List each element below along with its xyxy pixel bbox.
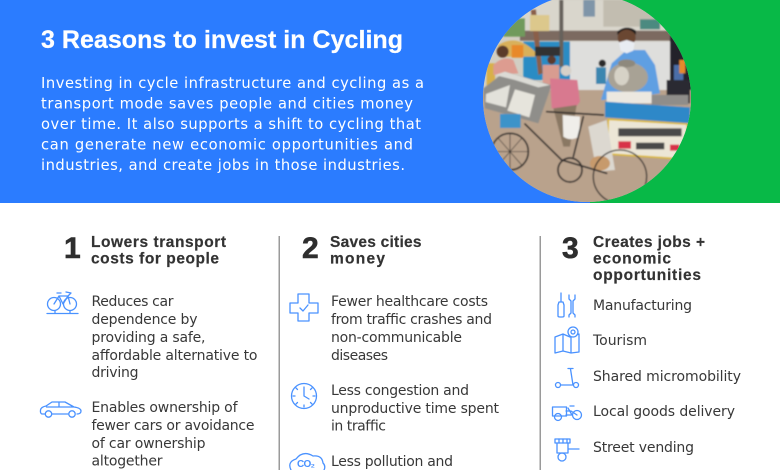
- icon: screwdriver and wrench: [558, 293, 575, 317]
- photo: street vendor with cargo bicycle: [477, 0, 697, 207]
- label: street vending: Street vending: [593, 440, 694, 456]
- text: healthcare costs: non-communicable: [331, 330, 462, 346]
- text: less congestion: unproductive time spent: [331, 401, 500, 417]
- number 1: 1: [64, 232, 81, 265]
- label: local goods delivery: Local goods delivery: [593, 404, 735, 420]
- icon: CO2 cloud: [290, 454, 325, 470]
- text: healthcare costs: Fewer healthcare costs: [331, 294, 488, 310]
- heading 2: money: [330, 250, 385, 268]
- intro text: [41, 75, 424, 174]
- divider: [540, 236, 541, 470]
- text: healthcare costs: from traffic crashes and: [331, 312, 492, 328]
- intro text: Investing in cycle infrastructure and cycling as a: [41, 75, 424, 92]
- label: CO2: CO₂: [297, 459, 315, 470]
- heading 1: [91, 234, 226, 268]
- number 2: 2: [302, 232, 319, 265]
- heading 3: Creates jobs +: [593, 234, 705, 251]
- heading 2: Saves cities: [330, 234, 422, 251]
- heading 3: opportunities: [593, 267, 701, 284]
- heading 2: [330, 234, 422, 268]
- text: enables ownership: of car ownership: [92, 436, 206, 452]
- intro text: over time. It also supports a shift to cycling that: [41, 116, 421, 133]
- header band: green: [590, 0, 780, 203]
- column 2: saves cities money: [290, 232, 500, 470]
- label: shared micromobility: Shared micromobility: [593, 369, 741, 385]
- text: less pollution: Less pollution and: [331, 454, 453, 470]
- text: reduces car dependence: driving: [92, 365, 138, 381]
- header band: blue: [0, 0, 590, 203]
- intro text: transport mode saves people and cities money: [41, 96, 413, 112]
- title: 3 Reasons to invest in Cycling: [41, 26, 403, 54]
- heading 1: Lowers transport: [91, 234, 226, 251]
- text: healthcare costs: diseases: [331, 348, 388, 364]
- icon: car: [40, 402, 81, 417]
- icon: clock: [292, 384, 316, 408]
- text: less congestion: in traffic: [331, 418, 386, 434]
- icon: map with pin: [555, 327, 579, 353]
- text: reduces car dependence: providing a safe,: [92, 330, 206, 346]
- text: healthcare costs: [331, 294, 492, 364]
- icon: cargo bike: [552, 406, 582, 420]
- label: tourism: Tourism: [592, 333, 647, 349]
- text: reduces car dependence: Reduces car: [92, 294, 174, 310]
- text: less congestion: [331, 383, 500, 434]
- icon: bicycle on rack: [47, 292, 78, 314]
- text: enables ownership: Enables ownership of: [92, 400, 239, 416]
- divider: [278, 236, 280, 470]
- intro text: can generate new economic opportunities and: [41, 136, 413, 154]
- column 3: creates jobs: [552, 232, 741, 461]
- number 3: 3: [562, 232, 579, 265]
- icon: scooter: [556, 368, 578, 388]
- label: manufacturing: Manufacturing: [593, 298, 692, 314]
- text: enables ownership: altogether: [92, 454, 163, 470]
- intro text: industries, and create jobs in those industries.: [41, 157, 405, 174]
- text: reduces car dependence: affordable alternative to: [92, 348, 258, 364]
- text: reduces car dependence: [92, 294, 258, 381]
- icon: street vending cart: [555, 439, 579, 461]
- text: enables ownership: [92, 400, 254, 470]
- text: reduces car dependence: dependence by: [92, 312, 198, 328]
- heading 3: [593, 234, 705, 284]
- heading 1: costs for people: [91, 250, 219, 268]
- icon: medical cross with check: [290, 294, 318, 321]
- column 1: lowers transport costs: [40, 232, 257, 470]
- text: less congestion: Less congestion and: [331, 383, 469, 399]
- text: enables ownership: fewer cars or avoidance: [92, 418, 254, 434]
- heading 3: economic: [593, 250, 671, 268]
